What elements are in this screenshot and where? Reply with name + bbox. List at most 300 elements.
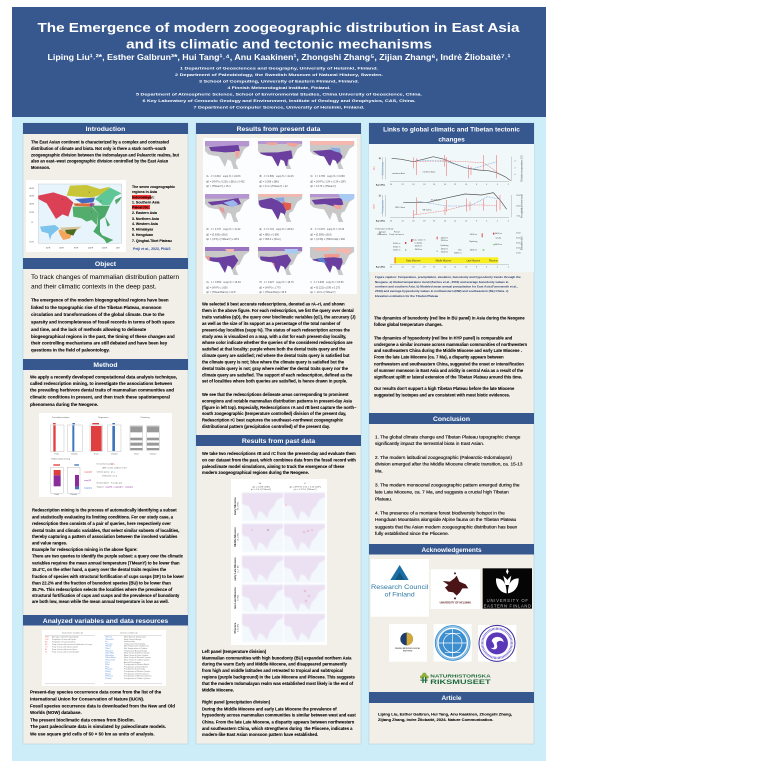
chart: a temperature and bunodonty: northern Asia bbox=[423, 171, 436, 174]
chart: c Tibetan Plateau elevation: Qaidong bbox=[440, 245, 449, 247]
text: present results description: climate query are satisfied. The support of each redescription, defined as the bbox=[202, 372, 353, 377]
text: method explanation: variables requires the mean annual temperature (TMeanY) to be lower than bbox=[32, 560, 180, 565]
logo: Research Council of Finland: of Finland bbox=[385, 591, 415, 598]
chart: b precipitation and hypsodonty: NW China bbox=[395, 207, 406, 209]
figure: variables table: Mean Diurnal Range bbox=[124, 638, 141, 641]
figure: redescription mining schematic bbox=[39, 413, 172, 497]
legend: zoogeographic regions: 7. Qinghai-Tibet Plateau bbox=[132, 239, 172, 243]
heading: links to global climatic and Tibetan tectonic changes: Links to global climatic and Tibetan tectonic bbox=[383, 126, 520, 134]
figure: variables table: Annual Precipitation bbox=[124, 661, 141, 664]
figure: redescription mining schematic: R = (qD, qC) bbox=[111, 483, 123, 485]
figure: redescription mining schematic: Clustering bbox=[141, 416, 149, 419]
text: present results description: distributional pattern (precipitation controlled) of the present day. bbox=[202, 424, 330, 429]
chart: b precipitation and hypsodonty: 1000 bbox=[516, 206, 522, 208]
page background bbox=[12, 117, 546, 761]
map captions: rE J = 0.724 supp % = 28.94 bbox=[259, 228, 294, 231]
logo: University of Eastern Finland: EASTERN FINLAND bbox=[484, 604, 531, 609]
text: object statement bbox=[31, 274, 179, 290]
text: right panel precipitation division: hypsodonty across mammalian communities is similar between west and east bbox=[202, 713, 356, 718]
legend: zoogeographic regions: 3. Northern Asia bbox=[132, 217, 159, 221]
text: method explanation: Redescription mining is the process of automatically identifying a subset bbox=[32, 508, 177, 513]
legend: zoogeographic regions: 4. Western Asia bbox=[132, 222, 158, 226]
figure: redescription mining schematic: supp(qC) bbox=[84, 487, 92, 489]
chart: b precipitation and hypsodonty: 12 bbox=[454, 220, 457, 222]
figure: redescription mining schematic: supp(R) = supp(qD) ∩ supp(qC) bbox=[105, 487, 134, 489]
figure: redescription mining schematic: Traits bbox=[94, 453, 98, 456]
text: right panel precipitation division: During the Middle Miocene and early Late Miocene the prevalence of bbox=[202, 706, 337, 711]
text: method explanation: 35.7%. This redescription selects the localities where the prevalence of bbox=[32, 587, 173, 592]
figure: variables table: Precipitation of Wettest Month bbox=[124, 663, 149, 666]
text: left panel temperature division: during the warm Early and Middle Miocene, and disappeared permanently bbox=[202, 662, 348, 666]
legend: zoogeographic regions: regions in Asia bbox=[132, 190, 157, 194]
chart: c Tibetan Plateau elevation: 18 bbox=[423, 266, 426, 268]
logo: University of Helsinki: UNIVERSITY OF HELSINKI bbox=[440, 602, 471, 605]
text: left panel temperature division bbox=[202, 649, 355, 692]
chart: b precipitation and hypsodonty: Age (Ma) bbox=[376, 220, 385, 223]
chart: b precipitation and hypsodonty: 1500 bbox=[516, 195, 522, 197]
figure: past redescription maps: 11-7 Ma bbox=[238, 565, 240, 573]
text: conclusions bbox=[375, 435, 523, 536]
figure: variables table: PDryQ bbox=[105, 672, 111, 675]
text: data resources: Present-day species occurrence data come from the list of the bbox=[30, 689, 162, 694]
map: rG bbox=[205, 247, 249, 275]
figure: redescription mining schematic: supp(R) bbox=[84, 480, 91, 482]
heading: article: Article bbox=[442, 695, 462, 702]
heading: conclusion bbox=[369, 413, 534, 424]
chart: c Tibetan Plateau elevation: 1500 bbox=[516, 252, 522, 254]
affiliations bbox=[136, 66, 422, 110]
figure caption: Figure caption: Temperature, precipitation, elevation, bunodonty and hypsodonty trends through the bbox=[375, 275, 521, 279]
map: zoogeographic regions: 45°N bbox=[29, 195, 34, 197]
chart: a temperature and bunodonty: 24 bbox=[390, 184, 393, 186]
figure: variables table: TMeanWarm bbox=[105, 656, 116, 659]
chart: c Tibetan Plateau elevation: Fault, tectonics bbox=[389, 233, 404, 236]
chart: c Tibetan Plateau elevation: 5500 bbox=[516, 232, 522, 234]
chart: a temperature and bunodonty: 18 bbox=[423, 184, 426, 186]
text: method explanation: fraction of species with structural fortification of cups cusps (SF) to be lower bbox=[32, 574, 184, 579]
figure: variables table: Average cusp/tooth hypsodonty bbox=[52, 636, 79, 638]
panel: column 3 bbox=[369, 123, 534, 744]
text: conclusions: Hengduan Mountains alongside Alpine fauna on the Tibetan Plateau bbox=[375, 517, 517, 522]
text: conclusions: significantly impact the terrestrial biota in East Asian. bbox=[375, 441, 484, 446]
chart: a temperature and bunodonty: southern Asia bbox=[392, 172, 406, 175]
chart: a temperature and bunodonty: 2 bbox=[514, 167, 516, 169]
chart: a temperature and bunodonty: 10 bbox=[465, 184, 468, 186]
figure: redescription mining schematic: Support: bbox=[97, 486, 105, 489]
title bbox=[38, 20, 520, 52]
map captions: qD = [HYP] ≤ 0.226 ∧ [BU] ≤ 0.432 bbox=[206, 180, 245, 184]
text: present results description: the climate query is not; blue where the climate query is satisfied but the bbox=[202, 360, 345, 365]
map captions: rG J = 0.650 supp % = 16.81 bbox=[206, 281, 241, 284]
heading: introduction: Introduction bbox=[86, 126, 125, 133]
authors: Liping Liu¹˒²*, Esther Galbrun³*, Hui Tang¹˒⁴, Anu Kaakinen¹, Zhongshi Zhang⁵, Zijian Zhang⁶, Indrė Žliobaitė⁷˒¹ bbox=[48, 51, 511, 62]
map: zoogeographic regions: 150°E bbox=[102, 248, 108, 250]
legend: zoogeographic regions: Peiji et al., 2023, PNAS bbox=[133, 247, 171, 251]
text: conclusions: suggests that the Asian modern zoogeographic distribution has been bbox=[375, 524, 518, 530]
text: article citation bbox=[378, 711, 512, 722]
map: rB bbox=[258, 141, 302, 169]
heading: links to global climatic and Tibetan tectonic changes bbox=[369, 123, 534, 144]
figure: past redescription maps: qD = 0.286 ≤ [BU] bbox=[252, 486, 270, 488]
figure: redescription mining schematic: [TMeanY] ≤ 15.4 bbox=[102, 474, 118, 477]
affiliations: 6 Key Laboratory of Cenozoic Geology and Environment, Institute of Geology and Geophysics, CAS, China. bbox=[142, 99, 416, 103]
logo: Naturhistoriska Riksmuseet: RIKSMUSEET bbox=[430, 680, 491, 686]
legend: zoogeographic regions: 5. Himalayas bbox=[132, 227, 153, 231]
map captions: qD = [HYP] ≤ 1.54 ∧ 0.24 ≤ [SF] bbox=[310, 180, 346, 184]
figure: variables table: TMeanDry bbox=[105, 654, 114, 657]
text: article citation: Zijiang Zhang, Indre Žliobaitė, 2024. Nature Communication. bbox=[378, 717, 493, 722]
chart: c Tibetan Plateau elevation: 16 bbox=[433, 266, 436, 268]
figure: climate and tectonic trends bbox=[369, 144, 534, 272]
figure: variables table: Proportion of taxa with lophs bbox=[52, 638, 76, 641]
text: present results description: Redescription rC best captures the southeast–northwest zoogeographic bbox=[202, 417, 344, 422]
figure: variables table: TMeanCold bbox=[105, 660, 115, 662]
text: data resources: The present bioclimatic data comes from Bioclim. bbox=[30, 718, 135, 722]
map: rC bbox=[310, 141, 354, 169]
logo: Finnish Meteorological Institute bbox=[389, 624, 427, 662]
text: method explanation: are both low, mean while the mean annual temperature is low as well. bbox=[32, 599, 169, 604]
logo: Finnish Meteorological Institute: FINNISH METEOROLOGICAL bbox=[395, 647, 421, 650]
text: present results description: study area is visualized on a map, with a dot for each present-day locality, bbox=[202, 334, 346, 339]
text: object background bbox=[31, 298, 175, 352]
text: left panel temperature division: Left panel (temperature division) bbox=[202, 649, 267, 654]
figure: variables table: Prop. of taxa with structural fortification of cusps bbox=[52, 643, 92, 646]
map: zoogeographic regions: 60°N bbox=[29, 188, 34, 190]
map captions: qC = -16.9 ≤ [TMeanY] bbox=[310, 291, 336, 294]
text: present results description: dental traits query is not; gray where neither the dental traits query nor the bbox=[202, 366, 349, 371]
text: object background: questions in the field of paleontology. bbox=[31, 347, 110, 352]
map: zoogeographic regions: 60°E bbox=[59, 248, 64, 250]
figure: past redescription maps: early Late Miocene bbox=[233, 557, 237, 581]
legend: zoogeographic regions: Indomalayan: bbox=[132, 196, 155, 200]
figure: redescription mining schematic: supp(qD) bbox=[84, 471, 92, 473]
chart: c Tibetan Plateau elevation: Isotope bbox=[379, 231, 387, 234]
chart: c Tibetan Plateau elevation: Estimation method bbox=[375, 227, 394, 230]
figure: redescription mining schematic: Redescription mining bbox=[51, 457, 70, 460]
chart: b precipitation and hypsodonty: 8 bbox=[476, 220, 478, 222]
chart: a temperature and bunodonty: 12 bbox=[454, 184, 457, 186]
text: object background: and time, and the lack of methods allowing to delineate bbox=[31, 327, 147, 332]
figure: nine redescription maps bbox=[203, 138, 357, 294]
text: dynamics discussion: Our results don't support a high Tibetan Plateau before the late Miocene bbox=[374, 386, 515, 391]
affiliations: 4 Finnish Meteorological Institute, Finland. bbox=[228, 86, 330, 90]
chart: b precipitation and hypsodonty: HYP bbox=[373, 204, 376, 209]
heading: method: Method bbox=[93, 362, 118, 369]
figure: variables table: TMeanY bbox=[105, 636, 113, 638]
figure: variables table: PColdQ bbox=[105, 678, 112, 680]
map: zoogeographic regions: 30°E bbox=[46, 248, 51, 250]
text: conclusions: 1. The global climate change and Tibetan Plateau topographic change bbox=[375, 435, 521, 440]
chart: c Tibetan Plateau elevation: Late Miocene bbox=[467, 259, 481, 262]
chart: b precipitation and hypsodonty: 14 bbox=[444, 220, 447, 222]
map: rD bbox=[205, 194, 249, 222]
affiliations: 5 Department of Atmospheric Science, School of Environmental Studies, China University of Geoscience, China. bbox=[136, 92, 422, 96]
chart: c Tibetan Plateau elevation: 2500 m bbox=[441, 251, 448, 253]
figure: redescription mining schematic: Climate bbox=[70, 493, 78, 496]
figure: variables table: AL bbox=[45, 648, 47, 651]
chart: b precipitation and hypsodonty: 22 bbox=[401, 220, 405, 222]
text: introduction: zoogeographic division between the Indomalayan and Palearctic realms, but bbox=[31, 152, 180, 157]
chart: c Tibetan Plateau elevation: 3500 m bbox=[415, 246, 422, 248]
chart: b precipitation and hypsodonty: 10 bbox=[465, 220, 468, 222]
figure: past redescription maps: Early Miocene bbox=[233, 497, 237, 515]
text: present results description: (figure in left top). Especially, Redescriptions rA and rB best capture the north– bbox=[202, 405, 357, 410]
chart: a temperature and bunodonty: BU bbox=[373, 166, 376, 170]
figure: variables table: Temperature Seasonality bbox=[124, 642, 145, 645]
text: conclusions: 3. The modern monsoonal zoogeographic pattern emerged during the bbox=[375, 482, 520, 488]
chart: a temperature and bunodonty: Relative temperature (°C) bbox=[520, 155, 523, 182]
figure: variables table: TMinC bbox=[105, 648, 111, 650]
map: zoogeographic regions: 30°N bbox=[29, 203, 34, 205]
map captions: qD = [BU] ≤ 0.896 bbox=[259, 234, 280, 236]
header banner bbox=[12, 7, 546, 117]
figure: variables table: TMeanDR bbox=[105, 639, 114, 641]
text: method explanation: and statistically evaluating its limiting conditions. For our study case, a bbox=[32, 514, 174, 519]
figure: variables table: Proportion of taxa bunodont bbox=[52, 640, 76, 644]
text: introduction: also an east–west zoogeographic division controlled by the East Asian bbox=[31, 159, 169, 164]
text: data resources: International Union for Conservation of Nature (IUCN). bbox=[30, 696, 144, 702]
figure: variables table: PTotY bbox=[105, 661, 111, 664]
chart: b precipitation and hypsodonty: b) bbox=[379, 194, 381, 198]
figure: variables table: Mean Annual Temperature bbox=[124, 636, 146, 638]
map captions: qC = [-0.56] ≤ [TMinCold] ≤ 692 bbox=[310, 238, 346, 241]
text: method explanation: There are two queries to identify the purple subset: a query over the climatic bbox=[32, 554, 184, 559]
affiliations: 1 Department of Geosciences and Geography, University of Helsinki, Finland. bbox=[180, 66, 378, 70]
figure: variables table: Prop. of taxa with obtuse lophs bbox=[52, 646, 78, 648]
map: zoogeographic regions: 180° bbox=[116, 248, 120, 250]
heading: results from past data bbox=[196, 435, 361, 446]
logo: University of Eastern Finland: UNIVERSITY OF bbox=[487, 598, 528, 603]
legend: zoogeographic regions bbox=[132, 185, 175, 251]
map captions: qD = 0.286 ≤ [BU] bbox=[259, 180, 279, 184]
chart: a temperature and bunodonty: 14 bbox=[444, 184, 447, 186]
figure: redescription mining schematic: qD = bbox=[111, 464, 116, 466]
heading: method bbox=[23, 359, 188, 370]
chart: b precipitation and hypsodonty: 20 bbox=[412, 220, 415, 222]
text: method intro: phenomena during the Neogene. bbox=[30, 402, 98, 407]
figure: redescription mining schematic: Traits bbox=[134, 453, 139, 456]
figure: redescription mining schematic: Dental traits query: bbox=[97, 463, 114, 466]
text: method intro: the prevailing herbivore dental traits of mammalian communities and bbox=[30, 388, 174, 392]
figure: variables table: TRangeY bbox=[105, 650, 114, 652]
text: object statement: To track changes of mammalian distribution pattern bbox=[31, 274, 179, 281]
map: zoogeographic regions: 120°E bbox=[88, 248, 94, 250]
chart: c Tibetan Plateau elevation: 2500 bbox=[516, 247, 522, 249]
chart: c Tibetan Plateau elevation: Age (Ma) bbox=[376, 266, 385, 269]
chart: b precipitation and hypsodonty: 2 bbox=[508, 220, 510, 222]
text: object background: biogeographical regions in the past, the timing of these changes and bbox=[31, 334, 175, 339]
text: conclusions: division emerged after the Middle Miocene climatic transition, ca. 15-13 bbox=[375, 462, 523, 466]
figure: variables table: Prop. of taxa with occlusal lophs bbox=[52, 650, 79, 654]
text: method explanation: redescription then consists of a pair of queries, here respectively over bbox=[32, 521, 171, 526]
figure: redescription mining schematic: [SF] ≤ 0.222 ∧ [BU] ≤ 0.357 bbox=[102, 467, 127, 470]
text: method explanation: 15.4°C, on the other hand, a query over the dental traits requires the bbox=[32, 567, 167, 572]
text: present results description: whose color indicate whether the queries of the considered redescription are bbox=[201, 340, 353, 345]
chart: c Tibetan Plateau elevation: Qiuliy bbox=[496, 237, 502, 239]
text: dynamics discussion: suggested by isotopes and are consistent with most biotic evidences. bbox=[374, 393, 510, 398]
chart: a temperature and bunodonty: 2 bbox=[508, 184, 510, 186]
figure: past redescription maps: rB bbox=[259, 482, 262, 485]
text: data resources bbox=[30, 689, 175, 736]
chart: c Tibetan Plateau elevation: 4000 m bbox=[495, 244, 502, 246]
figure: past redescription maps: late Late Miocene bbox=[233, 587, 237, 609]
chart: c Tibetan Plateau elevation: 3500 m bbox=[441, 240, 448, 242]
map captions: rD J = 0.747 supp % = 11.32 bbox=[206, 228, 241, 231]
map captions bbox=[206, 175, 346, 294]
text: present results description: as well as the size of its support as a percentage of the total number of bbox=[202, 321, 341, 326]
logos bbox=[371, 559, 532, 686]
legend: zoogeographic regions: The seven zoogeographic bbox=[132, 185, 175, 189]
chart: c Tibetan Plateau elevation: Nyalong bbox=[469, 241, 478, 243]
figure: variables table: TSeason bbox=[105, 643, 113, 645]
legend: zoogeographic regions: 6. Hengduan bbox=[132, 233, 153, 237]
map captions: qD = [HYP] ≤ 1.650 bbox=[206, 286, 228, 290]
figure: past redescription maps: qD = [HYP] ≤ 1.54 ∧ 0.24 ≤ [SF] bbox=[289, 486, 321, 488]
figure: variables table: Prop. of taxa with acute lophs bbox=[52, 648, 77, 651]
logo: Institute of Geology and Geophysics bbox=[478, 625, 516, 662]
chart: b precipitation and hypsodonty bbox=[373, 193, 523, 223]
figure: past redescription maps: 16-11 Ma bbox=[238, 532, 240, 541]
map: rF bbox=[310, 194, 354, 222]
chart: c Tibetan Plateau elevation: 2 bbox=[508, 266, 510, 268]
heading: results from past data: Results from past data bbox=[242, 438, 315, 445]
chart: b precipitation and hypsodonty: 24 bbox=[390, 220, 393, 222]
figure: variables table: PWetQ bbox=[105, 670, 112, 673]
map captions: qD = [0.595] ≤ [BU] bbox=[310, 234, 332, 236]
text: dynamics discussion: northwestern and southeastern China, suggested the onset or intensification bbox=[374, 361, 524, 366]
text: past results intro: on our dataset from the past, which combines data from the fossil record with bbox=[202, 457, 356, 462]
figure: variables table: Precipitation of Wettest Quarter bbox=[124, 670, 151, 673]
text: conclusions: Ma. bbox=[375, 468, 383, 474]
heading: conclusion: Conclusion bbox=[433, 416, 470, 423]
text: data resources: We use square grid cells of 50 × 50 km as units of analysis. bbox=[30, 731, 155, 736]
logo: Naturhistoriska Riksmuseet bbox=[420, 673, 491, 686]
figure: variables table: Climatic variables qC bbox=[120, 632, 138, 634]
figure: variables table: Mean Temp of Driest Quarter bbox=[124, 654, 149, 657]
logo: Research Council of Finland bbox=[371, 559, 429, 617]
chart: c Tibetan Plateau elevation bbox=[375, 227, 524, 269]
text: dynamics discussion: of summer monsoon in East Asia and aridity in central Asia as a result of the bbox=[374, 368, 524, 373]
chart: c Tibetan Plateau elevation: Lunpola bbox=[414, 242, 423, 244]
chart: c Tibetan Plateau elevation: 14 bbox=[444, 266, 447, 268]
legend: zoogeographic regions: 1. Southern Asia bbox=[132, 200, 160, 204]
chart: c Tibetan Plateau elevation: 2500 m bbox=[393, 250, 400, 252]
chart: c Tibetan Plateau elevation: 5000 m bbox=[470, 234, 477, 236]
map captions: qC = [TMeanWet] ≤ 36.8 bbox=[259, 291, 287, 294]
chart: a temperature and bunodonty: Age (Ma) bbox=[376, 183, 385, 186]
text: introduction bbox=[31, 140, 180, 170]
heading: results from present data bbox=[196, 123, 361, 134]
map: zoogeographic regions bbox=[26, 180, 126, 252]
heading: article bbox=[369, 692, 534, 703]
figure: redescription mining schematic: Climate bbox=[71, 453, 79, 456]
text: left panel temperature division: from high and middle latitudes and retreated to tropical and subtropical bbox=[202, 668, 343, 673]
text: dynamics discussion: and southeastern China during the Middle Miocene and early Late Miocene . bbox=[374, 348, 522, 353]
figure: past redescription maps: qC = 9.4 ≤ [TMeanY] bbox=[251, 488, 272, 491]
text: object background: sparsity and incompleteness of fossil records in terms of both space bbox=[31, 319, 175, 324]
logo: Research Council of Finland: Research Council bbox=[371, 584, 429, 591]
figure: variables table: TMeanWet bbox=[105, 652, 115, 655]
chart: c Tibetan Plateau elevation: Mean, water in bbox=[411, 239, 426, 242]
figure: variables table: PSeason bbox=[105, 669, 113, 671]
map captions: rF J = 0.679 supp % = 47.24 bbox=[310, 228, 345, 231]
map: rI bbox=[310, 247, 354, 275]
heading: analyzed variables: Analyzed variables and data resources bbox=[43, 618, 168, 625]
figure: variables table: Temperature Annual Range bbox=[124, 649, 147, 652]
chart: c Tibetan Plateau elevation: 4000 m bbox=[495, 233, 502, 235]
map: rH bbox=[258, 247, 302, 275]
map captions: qC = [TMeanWarm] ≤ 22.8 bbox=[206, 291, 236, 294]
map: zoogeographic regions: 3 bbox=[89, 192, 91, 194]
chart: b precipitation and hypsodonty: 16 bbox=[433, 220, 436, 222]
text: conclusions: Plateau. bbox=[375, 496, 392, 502]
map captions: rB J = 0.809 supp % = 41.26 bbox=[259, 175, 294, 178]
text: present results description: satisfied at that locality: purple where both the dental traits query and the bbox=[202, 346, 346, 352]
chart: c Tibetan Plateau elevation: 4000 m bbox=[441, 237, 448, 239]
logo: Finnish Meteorological Institute: INSTITUTE bbox=[403, 650, 413, 652]
chart: a temperature and bunodonty: 20 bbox=[412, 184, 415, 186]
figure: past redescription maps: Pliocene bbox=[233, 622, 237, 633]
figure: variables table: Mean Temp of Warmest Quarter bbox=[124, 656, 151, 659]
text: left panel temperature division: regions (purple background) in the Late Miocene and Pliocene. This suggests bbox=[202, 674, 355, 680]
text: introduction: The East Asian continent is characterized by a complex and contrasted bbox=[31, 140, 169, 144]
chart: c Tibetan Plateau elevation: 24 bbox=[390, 266, 393, 268]
chart: c Tibetan Plateau elevation: 3500 bbox=[516, 242, 522, 244]
map: zoogeographic regions: 6 bbox=[77, 204, 79, 206]
figure: past redescription maps: qC = 0.179 ≤ [TMeanY] bbox=[294, 488, 317, 491]
map captions: qC = [-5.5] ≤ [TMeanY] ≤ 28.6 bbox=[206, 238, 240, 241]
figure: variables table: TMaxW bbox=[105, 646, 112, 648]
map captions: qD = [HYP] ≤ 1.770 bbox=[259, 286, 281, 290]
figure: redescription mining schematic: Traits bbox=[54, 453, 59, 456]
map captions: qC = [TMeanY] ≤ 15.4 bbox=[206, 185, 231, 188]
text: dynamics discussion: From the late Late Miocene (ca. 7 Ma), a disparity appears between bbox=[374, 355, 504, 360]
text: left panel temperature division: that the modern Indomalayan realm was established most likely in the end of bbox=[202, 681, 354, 686]
text: present results description: ecoregions and notable mammalian distribution patterns in present-day Asia bbox=[202, 398, 353, 403]
chart: a temperature and bunodonty: 4 bbox=[514, 161, 516, 163]
figure: redescription mining schematic: Regression bbox=[98, 416, 108, 419]
chart: c Tibetan Plateau elevation: 10 bbox=[465, 266, 468, 268]
panel: column 2 bbox=[196, 123, 361, 744]
text: conclusions: 4. The presence of a montane forest biodiversity hotspot in the bbox=[375, 510, 505, 516]
text: data resources: Fossil species occurrence data is downloaded from the New and Old bbox=[30, 703, 175, 708]
text: past results intro: paleoclimate model simulations, aiming to track the emergence of these bbox=[202, 464, 345, 469]
chart: b precipitation and hypsodonty: 18 bbox=[423, 220, 426, 222]
text: right panel precipitation division: China. From the late Late Miocene, a disparity appears between northwestern bbox=[202, 719, 355, 724]
chart: c Tibetan Plateau elevation: Fossil bbox=[394, 232, 400, 234]
heading: object bbox=[23, 258, 188, 269]
affiliations: 2 Department of Paleobiology, the Swedish Museum of Natural History, Sweden. bbox=[175, 73, 383, 77]
text: object statement: and their climatic contexts in the deep past. bbox=[31, 283, 157, 290]
chart: a temperature and bunodonty: 22 bbox=[401, 184, 405, 186]
chart: c Tibetan Plateau elevation: 4000 m bbox=[441, 248, 448, 250]
text: dynamics discussion: The dynamics of bunodonty (red line in BU panel) in Asia during the Neogene bbox=[374, 316, 525, 320]
text: present results description: We see that the redescriptions delineate areas corresponding to prominent bbox=[202, 392, 349, 397]
text: data resources: The past paleoclimate data is simulated by paleoclimate models. bbox=[30, 724, 166, 729]
text: dynamics discussion: undergone a similar increase across mammalian communities of northwestern bbox=[374, 342, 528, 347]
chart: c Tibetan Plateau elevation: 3000 m bbox=[415, 249, 422, 251]
figure: variables table: SF bbox=[45, 644, 48, 646]
text: conclusions: late Late Miocene, ca. 7 Ma, and suggests a crucial high Tibetan bbox=[375, 490, 509, 494]
figure: past redescription maps: 23-16 Ma bbox=[238, 501, 240, 510]
text: right panel precipitation division: modern-like East Asian monsoon pattern have established. bbox=[202, 732, 318, 737]
chart: a temperature and bunodonty: 16 bbox=[433, 184, 436, 186]
chart: c Tibetan Plateau elevation: 6 bbox=[486, 266, 488, 268]
map captions: rI J = 0.608 supp % = 15.83 bbox=[310, 281, 344, 284]
text: conclusions: fully established since the Pliocene. bbox=[375, 531, 449, 536]
map: rA bbox=[205, 141, 249, 169]
chart: a temperature and bunodonty: a) bbox=[379, 156, 381, 160]
